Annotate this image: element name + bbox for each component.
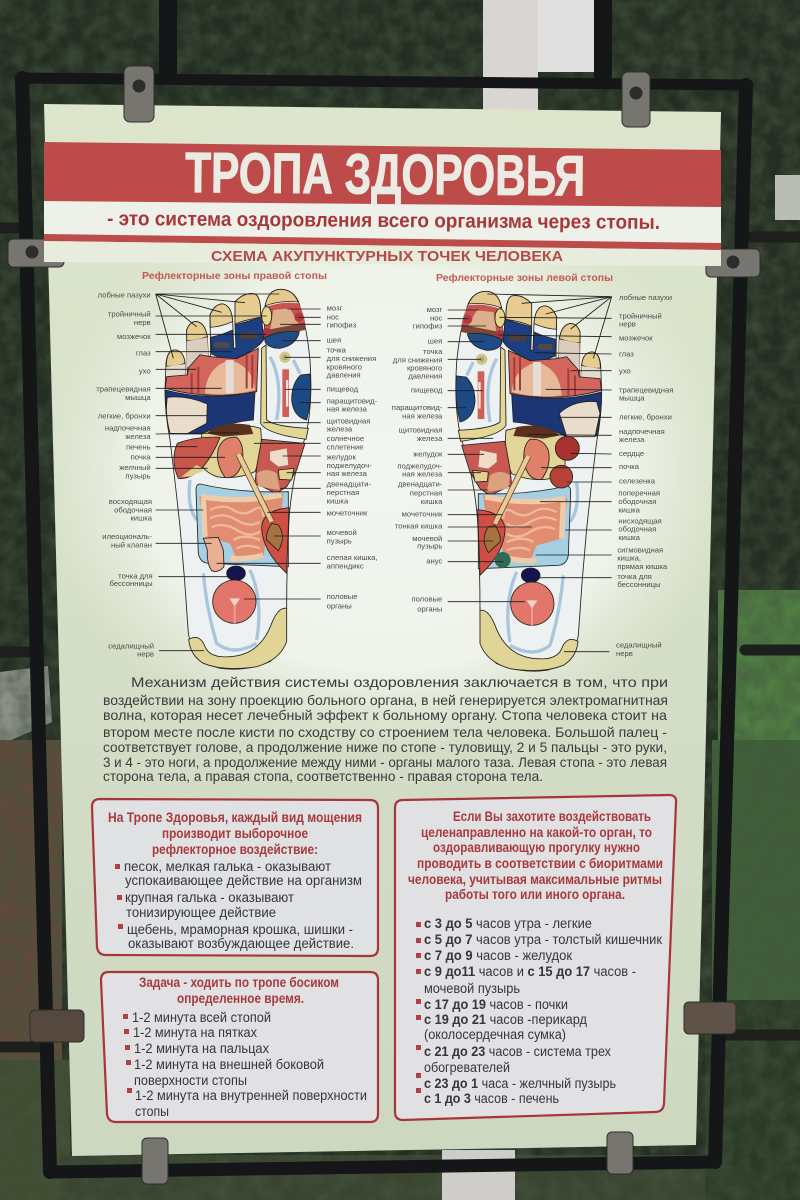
right labels left foot: кишка, bbox=[617, 554, 641, 563]
left labels left foot: паращитовид- bbox=[392, 403, 443, 412]
left labels left foot: пузырь bbox=[417, 542, 442, 551]
right labels left foot: нерв bbox=[619, 320, 636, 329]
right labels right foot: слепая кишка, bbox=[327, 553, 378, 562]
right labels left foot: нерв bbox=[616, 649, 633, 658]
left labels left foot: гипофиз bbox=[413, 321, 443, 330]
left labels left foot: точка bbox=[423, 347, 443, 356]
left labels right foot: пузырь bbox=[125, 472, 151, 481]
schedule list: с 19 до 21 часов -перикард bbox=[424, 1012, 587, 1027]
paving panel list: щебень, мраморная крошка, шишки - bbox=[127, 922, 353, 937]
paving panel list: песок, мелкая галька - оказывают bbox=[124, 859, 331, 874]
right labels right foot: кровяного bbox=[327, 362, 362, 371]
schedule list: с 23 до 1 часа - желчный пузырь bbox=[424, 1076, 616, 1091]
left labels left foot: анус bbox=[426, 556, 442, 565]
schedule heading bbox=[408, 808, 663, 902]
task panel list: поверхности стопы bbox=[134, 1073, 247, 1088]
sign light centre bbox=[53, 263, 714, 729]
right labels left foot: нисходящая bbox=[618, 516, 662, 525]
right labels right foot: кишка bbox=[327, 496, 349, 505]
schedule list: с 1 до 3 часов - печень bbox=[424, 1091, 559, 1106]
schedule list: обогревателей bbox=[424, 1060, 510, 1075]
right labels right foot: ная железа bbox=[327, 469, 368, 478]
right labels left foot: лобные пазухи bbox=[619, 293, 672, 302]
right labels right foot: для снижения bbox=[327, 354, 376, 363]
right labels left foot: прямая кишка bbox=[617, 562, 668, 571]
left labels left foot: половые bbox=[411, 595, 442, 604]
diagram: left foot reflex zones bbox=[392, 291, 673, 671]
right labels left foot: мозжечок bbox=[619, 334, 653, 343]
right labels left foot: трапецевидная bbox=[619, 386, 673, 395]
left labels right foot: надпочечная bbox=[105, 424, 151, 433]
right labels right foot: паращитовид- bbox=[327, 396, 378, 405]
left labels left foot: поджелудоч- bbox=[397, 461, 443, 470]
right labels right foot: ная железа bbox=[327, 405, 368, 414]
right labels right foot: сплетение bbox=[327, 442, 364, 451]
paving panel heading: рефлекторное воздействие: bbox=[152, 841, 318, 857]
paving panel heading bbox=[108, 809, 362, 857]
right labels right foot: солнечное bbox=[327, 434, 364, 443]
title: ТРОПА ЗДОРОВЬЯ bbox=[185, 141, 585, 208]
right labels left foot: ухо bbox=[619, 367, 631, 376]
lung detail bbox=[166, 397, 207, 434]
right labels left foot: глаз bbox=[619, 350, 634, 359]
sign board bbox=[44, 104, 721, 1156]
left labels left foot: кровяного bbox=[407, 363, 442, 372]
description paragraph bbox=[103, 674, 668, 784]
left labels left foot: железа bbox=[417, 434, 443, 443]
right labels left foot bbox=[616, 293, 673, 658]
task panel heading: определенное время. bbox=[177, 990, 304, 1006]
right labels right foot: щитовидная bbox=[327, 416, 370, 425]
left labels right foot: ный клапан bbox=[111, 540, 152, 549]
left labels left foot: кишка bbox=[421, 497, 443, 506]
left foot heading: Рефлекторные зоны левой стопы bbox=[436, 272, 613, 284]
task panel list bbox=[132, 1010, 367, 1119]
left labels right foot: мозжечок bbox=[117, 332, 151, 341]
spleen bbox=[550, 465, 573, 488]
left labels right foot: глаз bbox=[136, 348, 151, 357]
right labels left foot: мышца bbox=[619, 394, 645, 403]
paving panel list bbox=[124, 859, 362, 951]
right labels left foot: бессонницы bbox=[617, 580, 661, 589]
left labels right foot: седалищный bbox=[108, 641, 154, 650]
right labels right foot: желудок bbox=[327, 452, 357, 461]
left labels left foot: мозг bbox=[427, 305, 443, 314]
right labels right foot: мочевой bbox=[327, 528, 357, 537]
right labels right foot: нос bbox=[327, 312, 339, 321]
right labels right foot: шея bbox=[327, 336, 341, 345]
left labels right foot: ободочная bbox=[114, 506, 152, 515]
left labels right foot: печень bbox=[126, 442, 151, 451]
left labels left foot bbox=[392, 305, 443, 614]
right labels right foot: точка bbox=[327, 346, 347, 355]
description paragraph: Механизм действия системы оздоровления заключается в том, что при bbox=[131, 674, 668, 690]
ileocecal valve and appendix bbox=[203, 537, 224, 571]
right labels left foot: железа bbox=[619, 435, 645, 444]
paving panel heading: производит выборочное bbox=[162, 825, 308, 841]
right labels right foot: пищевод bbox=[327, 385, 359, 394]
left labels left foot: нос bbox=[430, 314, 442, 323]
task panel heading bbox=[139, 974, 339, 1006]
right labels left foot: ободочная bbox=[618, 525, 656, 534]
right labels right foot: железа bbox=[327, 425, 353, 434]
schedule list: (околосердечная сумка) bbox=[424, 1027, 566, 1042]
right labels left foot: тройничный bbox=[619, 312, 662, 321]
left labels left foot: щитовидная bbox=[399, 425, 442, 434]
task panel heading: Задача - ходить по тропе босиком bbox=[139, 974, 339, 990]
schedule heading: целенаправленно на какой-то орган, то bbox=[421, 824, 652, 840]
left labels right foot: нерв bbox=[137, 650, 154, 659]
right labels left foot: легкие, бронхи bbox=[619, 412, 672, 421]
heart bbox=[555, 436, 579, 460]
diagram: right foot reflex zones bbox=[96, 289, 378, 669]
schedule list: с 9 до11 часов и с 15 до 17 часов - bbox=[424, 964, 636, 979]
schedule heading: работы того или иного органа. bbox=[445, 886, 625, 902]
left labels left foot: органы bbox=[417, 605, 442, 614]
schedule bullets bbox=[416, 922, 421, 1093]
right labels right foot: органы bbox=[327, 601, 352, 610]
schedule list: с 5 до 7 часов утра - толстый кишечник bbox=[424, 932, 662, 947]
paving panel bullets bbox=[115, 864, 123, 929]
right labels right foot: перстная bbox=[327, 488, 359, 497]
task panel list: 1-2 минута на пальцах bbox=[134, 1041, 269, 1056]
task panel list: 1-2 минута на внешней боковой bbox=[134, 1057, 324, 1072]
right labels left foot: почка bbox=[619, 462, 640, 471]
schedule list: с 3 до 5 часов утра - легкие bbox=[424, 916, 592, 931]
left labels right foot: бессонницы bbox=[109, 579, 153, 588]
schedule heading: человека, учитывая максимальные ритмы bbox=[408, 871, 662, 887]
leader lines right foot bbox=[156, 294, 321, 651]
left labels left foot: пищевод bbox=[411, 386, 443, 395]
description paragraph: втором месте после кисти по сходству со строением тела человека. Большой палец - bbox=[103, 724, 667, 740]
panel: paving effects bbox=[92, 799, 378, 956]
left labels right foot: точка для bbox=[118, 571, 153, 580]
left labels left foot: шея bbox=[428, 336, 442, 345]
leader lines left foot bbox=[448, 294, 612, 652]
left labels right foot: желчный bbox=[119, 463, 151, 472]
right labels left foot: надпочечная bbox=[619, 427, 665, 436]
schedule heading: Если Вы захотите воздействовать bbox=[453, 808, 651, 824]
schedule list bbox=[424, 916, 662, 1106]
right labels right foot: гипофиз bbox=[327, 321, 357, 330]
left labels right foot: мышца bbox=[125, 393, 151, 402]
right labels right foot: мочеточник bbox=[327, 509, 368, 518]
right labels right foot: мозг bbox=[327, 304, 343, 313]
paving panel list: оказывают возбуждающее действие. bbox=[128, 936, 354, 951]
scheme heading: СХЕМА АКУПУНКТУРНЫХ ТОЧЕК ЧЕЛОВЕКА bbox=[211, 248, 563, 265]
schedule list: с 17 до 19 часов - почки bbox=[424, 997, 568, 1012]
left labels right foot: восходящая bbox=[109, 497, 152, 506]
left labels right foot: железа bbox=[125, 432, 151, 441]
paving panel list: успокаивающее действие на организм bbox=[125, 873, 362, 888]
right labels left foot: сигмовидная bbox=[617, 545, 663, 554]
panel: biorhythm schedule bbox=[395, 795, 676, 1120]
panel: walking task bbox=[101, 972, 378, 1122]
left labels right foot: илеоциональ- bbox=[102, 532, 152, 541]
right labels right foot: пузырь bbox=[327, 536, 352, 545]
left labels right foot: тройничный bbox=[108, 310, 151, 319]
left labels right foot: легкие, бронхи bbox=[98, 411, 151, 420]
task panel list: стопы bbox=[135, 1104, 169, 1119]
right labels right foot: двенадцати- bbox=[327, 480, 372, 489]
right labels left foot: сердце bbox=[619, 449, 644, 458]
right labels right foot: поджелудоч- bbox=[327, 461, 372, 470]
left labels left foot: давления bbox=[408, 372, 442, 381]
subtitle: - это система оздоровления всего организма через стопы. bbox=[107, 208, 660, 234]
left labels right foot: трапецевидная bbox=[96, 385, 151, 394]
right foot heading: Рефлекторные зоны правой стопы bbox=[142, 270, 327, 282]
task panel list: 1-2 минута на внутренней поверхности bbox=[135, 1088, 367, 1103]
right labels left foot: селезенка bbox=[619, 477, 656, 486]
right labels right foot: половые bbox=[327, 592, 358, 601]
description paragraph: соответствует голове, а продолжение ниже по стопе - туловищу, 2 и 5 пальцы - это руки, bbox=[103, 739, 667, 755]
paving panel list: крупная галька - оказывают bbox=[125, 890, 294, 905]
header bands bbox=[44, 142, 721, 266]
schedule list: с 7 до 9 часов - желудок bbox=[424, 948, 572, 963]
left labels right foot: кишка bbox=[130, 514, 153, 523]
task panel bullets bbox=[123, 1014, 132, 1093]
anus bbox=[495, 552, 511, 568]
right labels left foot: поперечная bbox=[618, 489, 660, 498]
description paragraph: сторона тела, а правая стопа, соответственно - правая сторона тела. bbox=[103, 768, 543, 784]
lung detail bbox=[559, 401, 600, 437]
white pole bbox=[442, 0, 538, 1200]
right labels right foot bbox=[327, 304, 378, 610]
description paragraph: воздействии на зону проекцию больного органа, в ней генерируется электромагнитная bbox=[103, 692, 668, 708]
right labels left foot: седалищный bbox=[616, 641, 662, 650]
gallbladder zone bbox=[182, 465, 205, 477]
left labels left foot: перстная bbox=[410, 489, 442, 498]
left labels left foot: мочеточник bbox=[402, 510, 443, 519]
left labels left foot: двенадцати- bbox=[398, 480, 443, 489]
right labels left foot: кишка bbox=[618, 533, 641, 542]
description paragraph: 3 и 4 - это ноги, а продолжение между ними - органы малого таза. Левая стопа - это левая bbox=[103, 754, 667, 770]
paving panel heading: На Тропе Здоровья, каждый вид мощения bbox=[108, 809, 362, 825]
left labels left foot: ная железа bbox=[402, 411, 443, 420]
left labels left foot: тонкая кишка bbox=[395, 522, 443, 531]
paving panel list: тонизирующее действие bbox=[126, 905, 276, 920]
left labels left foot: ная железа bbox=[402, 470, 443, 479]
schedule list: с 21 до 23 часов - система трех bbox=[424, 1044, 611, 1059]
left labels right foot: ухо bbox=[139, 366, 151, 375]
left labels left foot: мочевой bbox=[412, 534, 442, 543]
schedule list: мочевой пузырь bbox=[424, 981, 520, 996]
left labels right foot bbox=[96, 290, 154, 659]
right labels right foot: давления bbox=[327, 370, 361, 379]
left labels right foot: нерв bbox=[134, 318, 151, 327]
task panel list: 1-2 минута на пятках bbox=[133, 1025, 257, 1040]
task panel list: 1-2 минута всей стопой bbox=[132, 1010, 271, 1025]
left labels left foot: для снижения bbox=[393, 355, 442, 364]
right labels right foot: аппендикс bbox=[327, 561, 364, 570]
right labels left foot: кишка bbox=[618, 505, 641, 514]
left labels right foot: лобные пазухи bbox=[98, 290, 151, 299]
schedule heading: оздоравливающую прогулку нужно bbox=[433, 839, 640, 855]
left labels right foot: почка bbox=[131, 452, 151, 461]
description paragraph: волна, которая несет лечебный эффект к больному органу. Стопа человека стоит на bbox=[103, 707, 667, 723]
right labels left foot: ободочная bbox=[618, 497, 656, 506]
left labels left foot: желудок bbox=[413, 450, 443, 459]
schedule heading: проводить в соответствии с биоритмами bbox=[417, 855, 663, 871]
liver bbox=[174, 437, 220, 479]
right labels left foot: точка для bbox=[617, 572, 652, 581]
